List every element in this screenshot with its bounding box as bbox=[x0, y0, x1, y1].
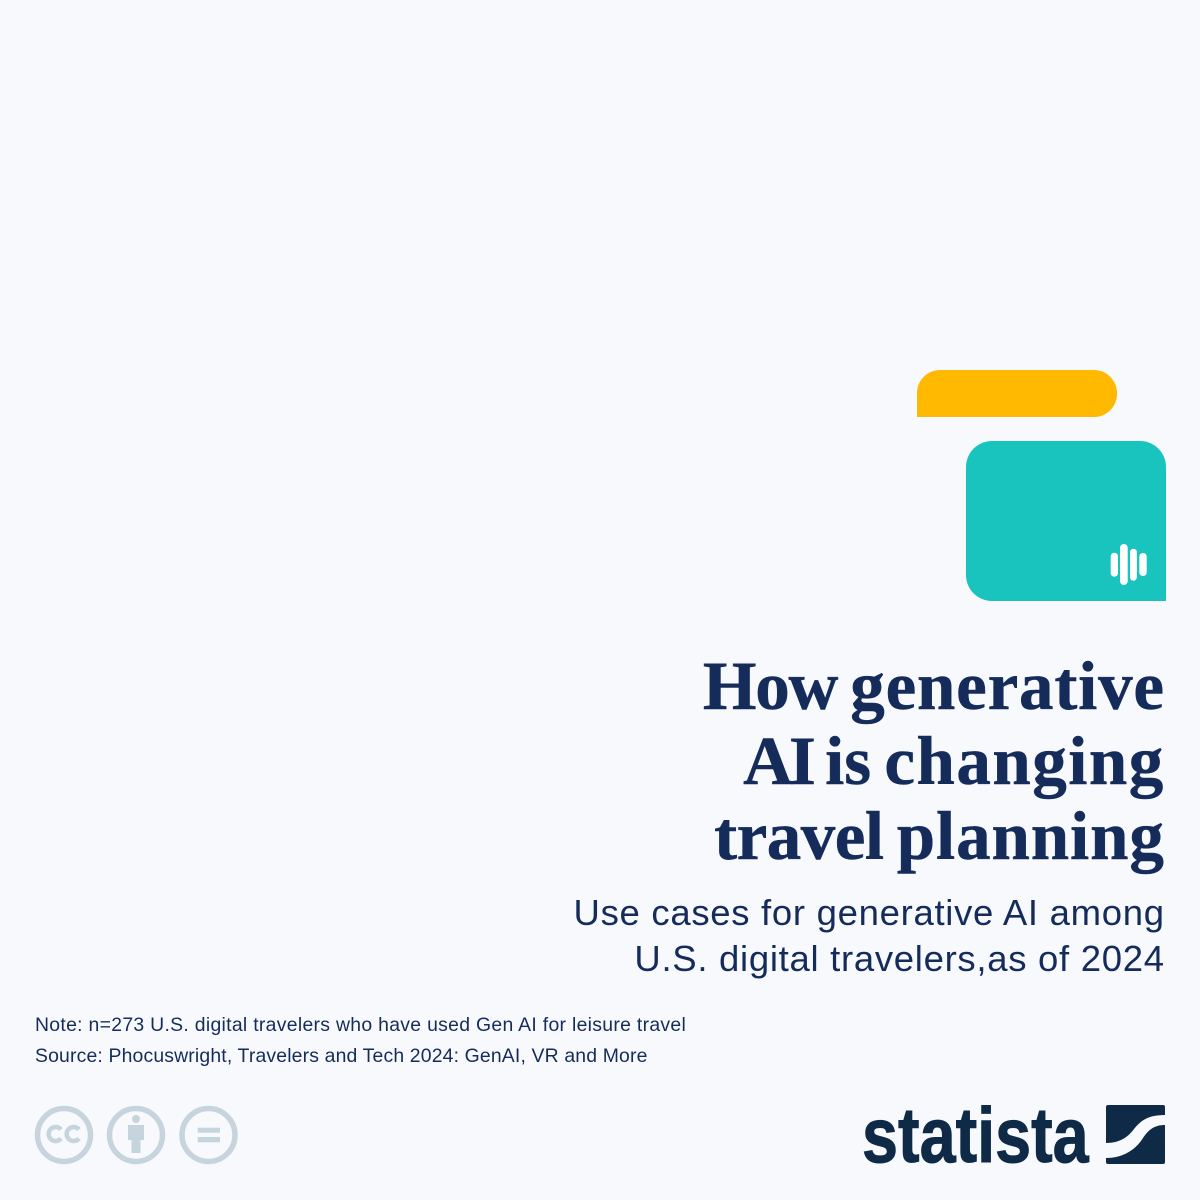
title bbox=[703, 648, 1165, 874]
shape: yellow rounded bar bbox=[917, 370, 1117, 416]
icon: creative commons licence icons bbox=[34, 1106, 238, 1164]
panel: teal rounded card with logo icon bbox=[966, 441, 1166, 601]
logo: statista wordmark: statista bbox=[862, 1091, 1089, 1179]
icon: white sound bars bbox=[1110, 544, 1147, 585]
note and source: Source: Phocuswright, Travelers and Tech 2024: GenAI, VR and More bbox=[35, 1045, 648, 1067]
subtitle bbox=[574, 892, 1165, 979]
logo: statista mark bbox=[1106, 1105, 1165, 1164]
note and source: Note: n=273 U.S. digital travelers who have used Gen AI for leisure travel bbox=[35, 1014, 686, 1036]
subtitle: Use cases for generative AI among bbox=[574, 892, 1165, 933]
subtitle: U.S. digital travelers,as of 2024 bbox=[634, 938, 1165, 979]
note and source bbox=[35, 1014, 686, 1067]
title: travel planning bbox=[714, 798, 1165, 874]
title: How generative bbox=[703, 648, 1165, 724]
title: AI is changing bbox=[743, 723, 1165, 799]
